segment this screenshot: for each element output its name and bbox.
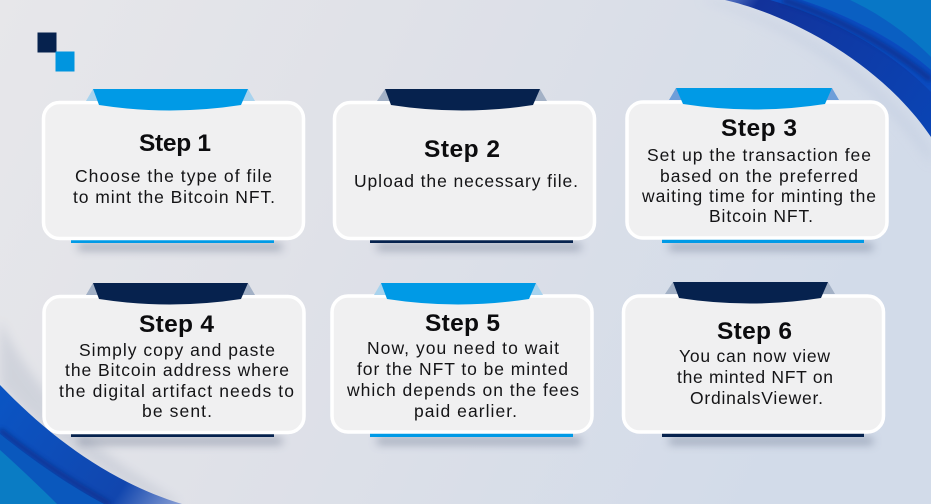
bottom bar [370,239,581,250]
body text: waiting time for minting the [641,186,876,206]
body text: the digital artifact needs to [59,381,294,401]
body text: the Bitcoin address where [65,360,289,380]
body text: to mint the Bitcoin NFT. [73,187,275,207]
body text: OrdinalsViewer. [690,388,823,408]
panel: step 2 [334,89,594,250]
heading: Step 1 [139,130,211,157]
bottom bar [71,239,282,250]
tab [86,89,255,110]
body text [677,346,833,408]
heading: Step 2 [424,136,500,163]
body text: Now, you need to wait [367,338,559,358]
body text: You can now view [679,346,830,366]
body text: which depends on the fees [346,380,579,400]
body text [641,145,876,226]
card [44,102,304,238]
card [44,296,304,432]
body text [73,166,275,207]
body text: based on the preferred [660,166,858,186]
body text: the minted NFT on [677,367,833,387]
heading: Step 4 [139,311,214,338]
tab [665,282,835,304]
body text: paid earlier. [414,401,517,421]
body text: be sent. [142,401,212,421]
card [334,102,594,238]
heading: Step 3 [721,115,797,142]
heading: Step 6 [717,318,792,345]
body text: for the NFT to be minted [357,359,568,379]
body text: Choose the type of file [75,166,272,186]
card [624,296,884,432]
bottom bar [71,433,282,444]
body text: Bitcoin NFT. [709,206,813,226]
tab [374,283,543,304]
card [627,102,887,238]
tab [377,89,547,110]
panel: step 6 [624,282,884,444]
body text [59,340,294,421]
tab [86,283,255,304]
swoosh: bottom left [0,320,182,504]
panel: step 1 [44,89,304,250]
heading: Step 5 [425,310,500,337]
logo icon [38,32,74,72]
body text: Upload the necessary file. [354,171,578,191]
body text [346,338,579,421]
body text: Simply copy and paste [79,340,275,360]
panel: step 4 [44,283,304,444]
swoosh: top right [700,0,931,165]
panel: step 3 [627,88,887,250]
bottom bar [662,433,873,444]
bottom bar [370,433,581,444]
panel: step 5 [332,283,592,444]
bottom bar [662,239,873,250]
tab [669,88,839,110]
body text: Set up the transaction fee [647,145,871,165]
card [332,296,592,432]
